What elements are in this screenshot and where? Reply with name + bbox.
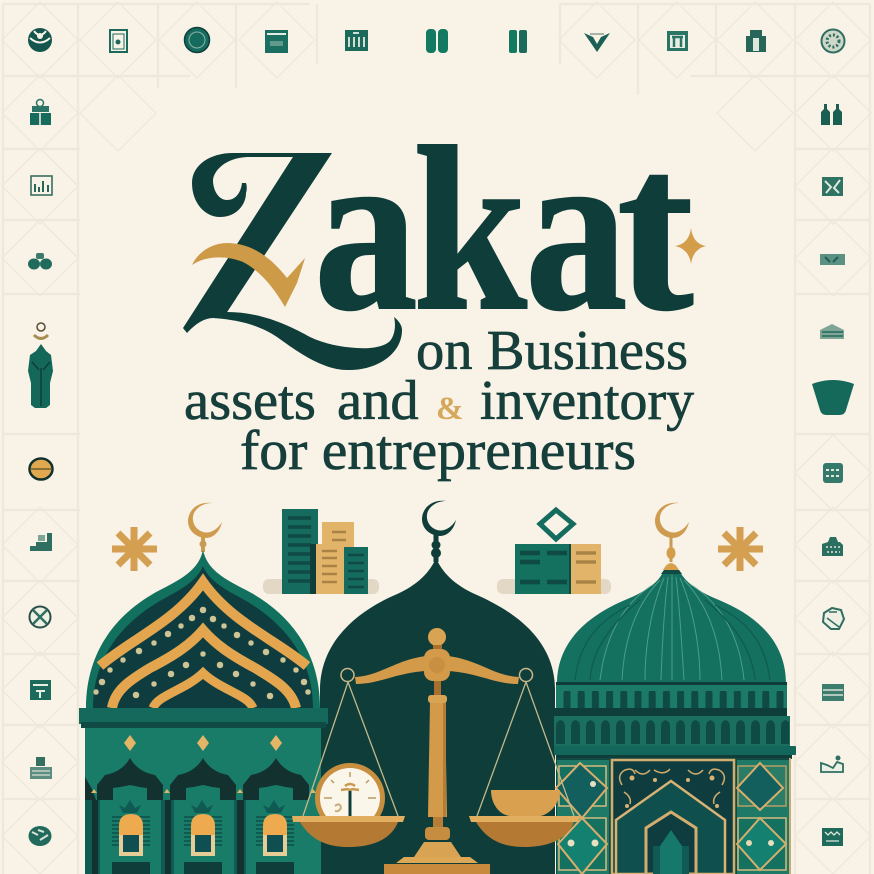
cornice: [79, 708, 328, 724]
gold swoosh: [192, 243, 305, 307]
window center: [184, 800, 222, 874]
icon: shop bars: [345, 30, 368, 51]
icon: rounded tile: [823, 463, 843, 483]
base: [414, 842, 461, 857]
left tile panels: [556, 760, 609, 874]
gold sparkle: [675, 228, 706, 264]
icon: stacked crate: [30, 757, 52, 779]
subtitle line 2: assets: [184, 370, 316, 432]
icon: paired bottles: [821, 104, 842, 125]
gold diamonds: [124, 735, 282, 751]
icon: crossed circle: [30, 606, 50, 628]
icons: left column: [28, 100, 53, 846]
icon: hanging robe figure: [28, 323, 53, 408]
lower drum: [554, 716, 790, 747]
inner niche: [646, 812, 696, 874]
icons: top row: [28, 28, 844, 53]
wall: [85, 727, 321, 874]
icon: globe medallion: [28, 28, 52, 52]
icon: window frame: [667, 31, 688, 51]
icon: ornate oval: [28, 826, 52, 846]
title word: Zakat: k: [413, 99, 527, 359]
icon: gold oval coin: [30, 458, 52, 480]
upper drum: [556, 683, 787, 709]
icon: twin bars: [509, 30, 527, 53]
scale of justice: [292, 628, 580, 874]
icons: right column: [812, 104, 854, 846]
subtitle line 2: inventory: [480, 370, 695, 432]
rings: [341, 668, 354, 682]
right mosque: [554, 503, 796, 874]
crescent: [188, 503, 222, 538]
icon: framed chart: [31, 176, 52, 195]
finial: [201, 536, 205, 552]
right pan: [476, 822, 574, 847]
swash Z body: [183, 153, 402, 370]
right bowl: [491, 790, 560, 816]
finial: [670, 535, 672, 562]
wall: [556, 758, 789, 874]
gold bands: [100, 582, 307, 708]
icon: ledger and diamond: [497, 510, 611, 594]
icon: pattern tile: [822, 177, 843, 196]
gold dots: [93, 606, 311, 700]
subtitle line 1: on Business: [416, 320, 688, 382]
window right: [256, 800, 294, 874]
icon: money bags: [28, 253, 52, 270]
left pan: [300, 822, 398, 847]
central portal: [612, 760, 734, 874]
title: [183, 144, 706, 482]
icon: twin barrels: [426, 29, 448, 53]
icon: woven band: [820, 254, 845, 265]
subtitle line 3: for entrepreneurs: [240, 420, 636, 482]
window left: [112, 800, 150, 874]
icon: chevron emblem: [584, 33, 610, 52]
icon: panel: [30, 680, 51, 700]
finial: [434, 534, 438, 562]
title word: Zakat: a: [525, 99, 627, 359]
ampersand: &: [436, 391, 464, 427]
title word: Zakat: Z: [175, 89, 333, 366]
icon: goods chest: [822, 828, 843, 846]
pointed arch panel: [616, 781, 725, 874]
beam: [355, 656, 426, 684]
dome body: [320, 558, 555, 874]
ribbed dome: [557, 570, 786, 684]
gold asterisk left: [112, 527, 157, 571]
title word: Zakat: a: [314, 98, 418, 359]
icon: textured medallion: [822, 30, 844, 52]
clock: [315, 763, 385, 833]
icon: gift boxes: [30, 100, 51, 125]
pan strings: [303, 682, 574, 816]
icon: buildings: [263, 509, 379, 594]
left mosque: [79, 503, 328, 874]
icon: desk with goods: [30, 533, 52, 551]
dome inner: [93, 566, 313, 708]
gold asterisk right: [718, 527, 763, 571]
dark band: [555, 708, 787, 716]
post head: [428, 628, 446, 646]
icon: ledger box: [265, 30, 288, 53]
post: [428, 702, 447, 817]
arabesque: [620, 769, 724, 804]
center dome: [320, 501, 555, 874]
icon: broken box: [821, 756, 843, 772]
icon: stripe crate: [822, 684, 844, 701]
icon: hexagon parcel: [823, 608, 844, 629]
icon: framed document: [110, 30, 127, 52]
right tile panels: [737, 760, 789, 874]
lower cornice: [554, 746, 796, 755]
subtitle line 2: and: [337, 370, 419, 432]
icon: large bowl: [812, 380, 854, 415]
dome outer: [86, 550, 320, 708]
icon: heap tile: [822, 537, 843, 556]
title word: Zakat: [227, 144, 694, 312]
icon: round coin: [184, 28, 210, 52]
title word: Zakat: t: [617, 100, 694, 360]
scalloped arcade: [85, 758, 316, 800]
subtitle line 2: [184, 370, 695, 432]
icon: small factory: [746, 30, 766, 52]
pilasters: [85, 800, 246, 874]
icon: landscape tile: [820, 324, 844, 339]
crescent: [655, 503, 689, 538]
crescent: [422, 501, 456, 536]
